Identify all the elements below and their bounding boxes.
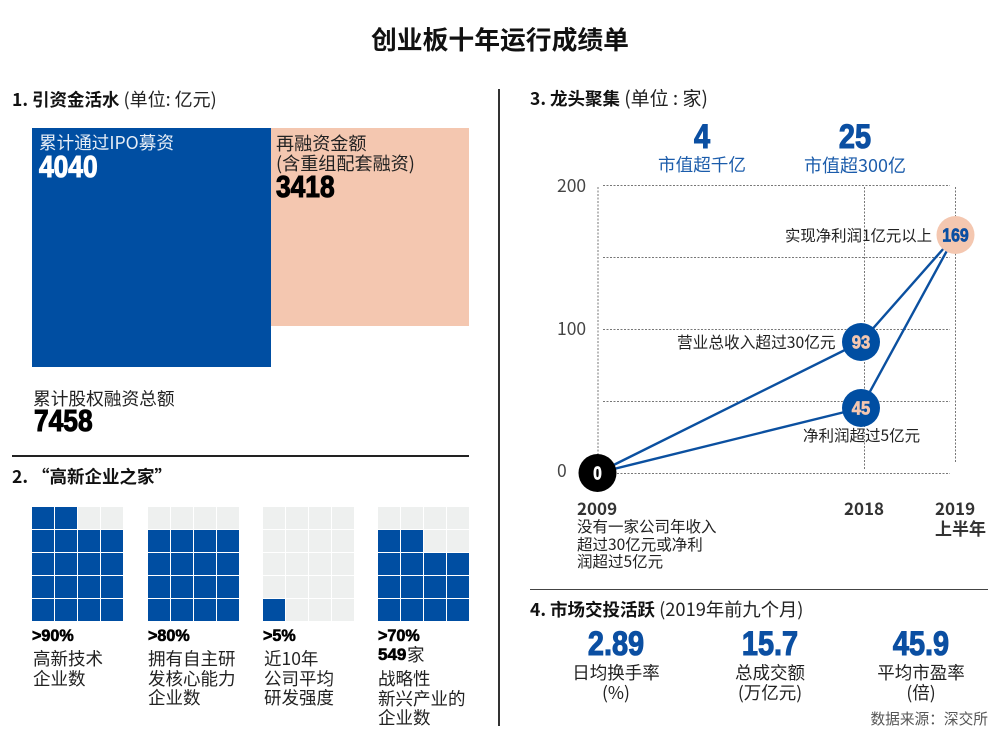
caption: core R&D: 发核心能力 <box>148 666 236 690</box>
stat: 5 percent: >5% <box>263 626 296 645</box>
caption: R&D intensity: 近10年 <box>264 646 318 671</box>
axis label: 200: 200 <box>557 173 586 198</box>
caption: R&D intensity: 公司平均 <box>264 666 334 690</box>
caption: turnover rate: (%) <box>602 680 630 704</box>
note: 2009: 润超过5亿元 <box>577 550 663 572</box>
caption: R&D intensity: 研发强度 <box>264 685 334 710</box>
heading: section 4: 4. 市场交投活跃 (2019年前九个月) <box>530 596 803 622</box>
stat: turnover rate: 2.89 <box>588 625 644 663</box>
stat: 70 percent: >70% <box>378 626 420 645</box>
waffle chart: R&D intensity <box>263 507 354 621</box>
x label: 2019 first half: 2019 <box>935 495 975 520</box>
caption: core R&D: 企业数 <box>148 685 200 710</box>
caption: strategic emerging: 战略性 <box>378 666 430 691</box>
point: 2009 <box>578 454 616 492</box>
label: refinancing <box>276 130 415 176</box>
caption: strategic emerging: 新兴产业的 <box>378 686 466 710</box>
source: 数据来源：深交所 <box>870 708 988 729</box>
caption: core R&D <box>148 646 236 710</box>
waffle chart: high-tech enterprises <box>32 507 123 621</box>
label: net profit over 100 million: 实现净利润1亿元以上 <box>785 224 932 246</box>
number: 4040: 4040 <box>39 149 98 184</box>
caption: average PE: (倍) <box>906 680 936 704</box>
x label: 2019 first half <box>935 495 986 540</box>
x label: 2009: 2009 <box>577 495 617 520</box>
heading: section 1: 1. 引资金活水 (单位: 亿元) <box>12 86 217 112</box>
block: refinancing <box>271 128 469 326</box>
label: IPO fundraising: 累计通过IPO募资 <box>39 130 174 155</box>
series: revenue over 3 billion <box>598 235 956 473</box>
heading: section 2: 2. “高新企业之家” <box>12 464 172 489</box>
point: 169 <box>936 216 974 254</box>
point: 45: 45 <box>852 398 870 418</box>
caption: strategic emerging: 企业数 <box>378 705 430 730</box>
panel: capital raising blocks <box>32 128 469 367</box>
x label: 2018: 2018 <box>844 495 884 520</box>
label: refinancing: 再融资金额 <box>276 130 366 156</box>
stat: 4: 4 <box>694 118 710 156</box>
point: 93: 93 <box>852 332 870 352</box>
caption: average PE <box>877 660 965 704</box>
caption: average PE: 平均市盈率 <box>877 660 965 685</box>
number: 7458: 7458 <box>34 403 93 438</box>
point: 93 <box>842 323 880 361</box>
caption: turnover rate <box>572 660 660 704</box>
stat: 80 percent: >80% <box>148 626 190 645</box>
stat: total turnover: 15.7 <box>742 625 798 663</box>
stat: 549 companies: 549 <box>378 645 406 664</box>
axis label: 100: 100 <box>557 316 586 341</box>
note: 2009 <box>577 515 717 572</box>
caption: high-tech: 企业数 <box>33 666 86 690</box>
block: IPO fundraising <box>32 128 271 367</box>
waffle chart: strategic emerging industries <box>378 507 469 621</box>
caption: total turnover <box>735 660 805 704</box>
label: refinancing: (含重组配套融资) <box>276 150 415 176</box>
point: 45 <box>842 389 880 427</box>
caption: over 30 billion: 市值超300亿 <box>804 152 906 178</box>
label: total equity financing: 累计股权融资总额 <box>33 385 175 411</box>
caption: total turnover: (万亿元) <box>738 680 802 704</box>
note: 2009: 没有一家公司年收入 <box>577 515 717 537</box>
caption: high-tech <box>33 646 103 690</box>
caption: core R&D: 拥有自主研 <box>148 646 236 671</box>
label: revenue over 3 billion: 营业总收入超过30亿元 <box>677 330 836 353</box>
stat: 549 companies <box>378 642 424 667</box>
label: net profit over 500 million: 净利润超过5亿元 <box>803 424 920 446</box>
caption: total turnover: 总成交额 <box>735 660 805 685</box>
caption: turnover rate: 日均换手率 <box>572 660 660 685</box>
axis label: 0: 0 <box>557 458 567 483</box>
heading: section 3: 3. 龙头聚集 (单位 : 家) <box>530 84 708 111</box>
stat: 549 companies: 家 <box>407 642 424 667</box>
title: 创业板十年运行成绩单 <box>371 20 629 57</box>
point: 169: 169 <box>942 226 969 246</box>
x label: 2019 first half: 上半年 <box>935 515 986 540</box>
caption: R&D intensity <box>264 646 334 710</box>
stat: 90 percent: >90% <box>32 626 74 645</box>
caption: strategic emerging <box>378 666 466 730</box>
point: 2009: 0 <box>593 464 602 484</box>
number: 3418: 3418 <box>276 169 335 204</box>
series: net profit over 500 million <box>598 235 956 473</box>
caption: over 100 billion: 市值超千亿 <box>658 152 746 177</box>
stat: average PE: 45.9 <box>893 625 949 663</box>
note: 2009: 超过30亿元或净利 <box>577 532 703 554</box>
waffle chart: core R&D capability <box>148 507 239 621</box>
stat: 25: 25 <box>839 118 871 156</box>
line chart <box>578 185 974 492</box>
caption: high-tech: 高新技术 <box>33 646 103 671</box>
